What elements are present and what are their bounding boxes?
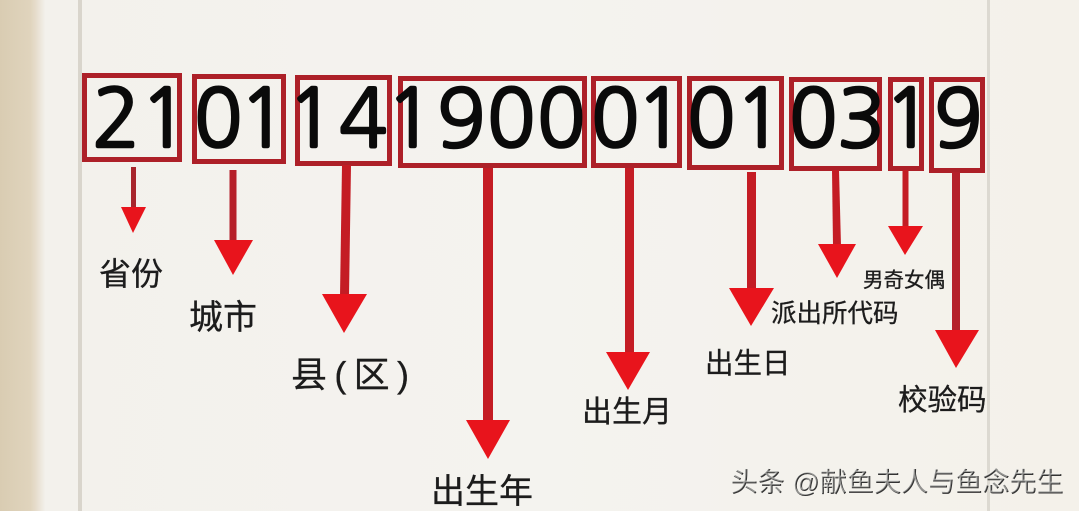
- labels: [99, 256, 987, 511]
- digits: 1900: 1900: [386, 79, 585, 159]
- box: county digits: [298, 78, 390, 164]
- digit: 1: 1: [884, 79, 932, 159]
- box: check digit: [932, 80, 982, 170]
- arrow: police station code: [818, 170, 856, 278]
- box: gender digit: [890, 80, 922, 168]
- arrow: birth day: [729, 172, 774, 326]
- label: gender: 男奇女偶: [863, 269, 945, 292]
- box: city digits: [194, 76, 284, 162]
- arrow: gender: [888, 170, 923, 255]
- label: city: 城市: [189, 299, 257, 337]
- digits: 01: 01: [194, 79, 287, 159]
- arrow: province: [121, 167, 146, 233]
- arrow: city: [214, 170, 253, 275]
- label: birth month: 出生月: [582, 396, 672, 429]
- digit: 9: 9: [934, 79, 982, 159]
- box: police station digits: [792, 80, 880, 168]
- label: police station code: 派出所代码: [771, 300, 899, 328]
- box: birth year digits: [400, 78, 584, 166]
- digits: 01: 01: [591, 79, 684, 159]
- arrow: county: [322, 165, 367, 333]
- box: birth day digits: [690, 78, 782, 168]
- digits: 14: 14: [287, 79, 387, 159]
- arrow: birth year: [466, 168, 510, 459]
- arrow: check digit: [935, 172, 979, 368]
- box: birth month digits: [594, 78, 680, 166]
- arrow: birth month: [606, 168, 650, 390]
- digits: 21: 21: [92, 79, 188, 159]
- label: check digit: 校验码: [898, 384, 987, 417]
- watermark: 头条 @献鱼夫人与鱼念先生: [731, 468, 1064, 498]
- label: birth day: 出生日: [705, 348, 791, 380]
- box: province digits: [84, 76, 180, 160]
- digits: 03: 03: [789, 79, 885, 159]
- red outlined boxes around ID number groups: [84, 76, 982, 170]
- watermark: 头条 @献鱼夫人与鱼念先生: [730, 467, 1063, 497]
- ID number digits: [92, 79, 982, 159]
- label: province: 省份: [99, 256, 163, 292]
- label: county: 县(区): [291, 354, 409, 395]
- digits: 01: 01: [687, 79, 783, 159]
- label: birth year: 出生年: [431, 473, 533, 511]
